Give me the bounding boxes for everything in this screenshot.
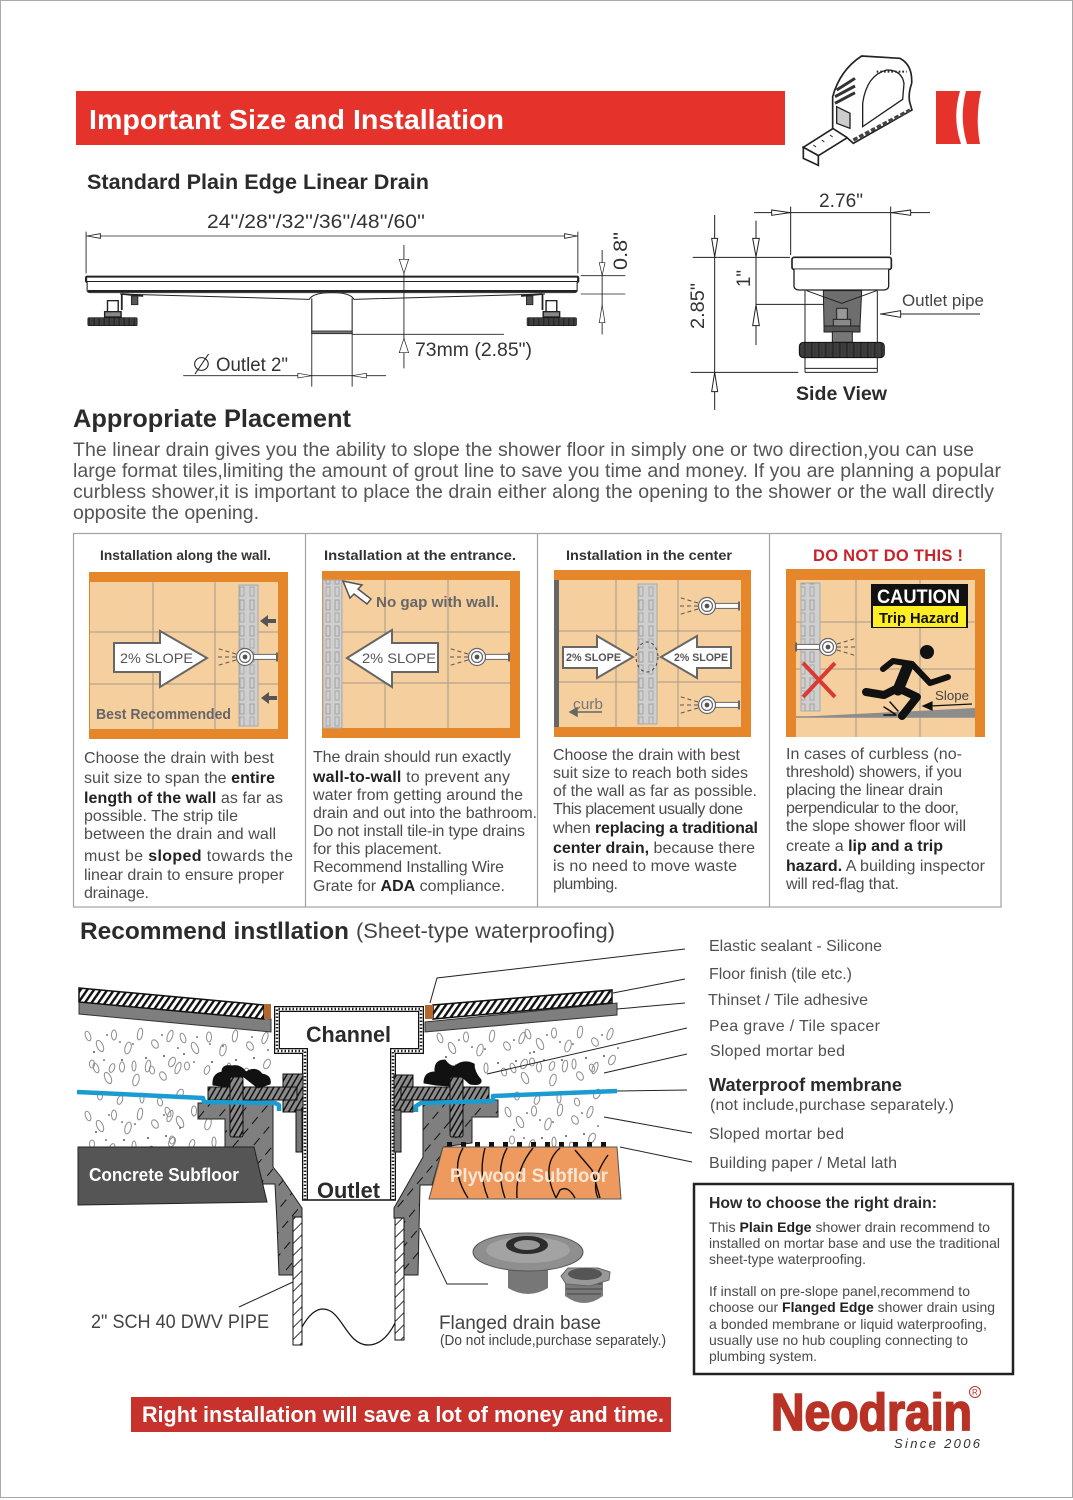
diagram: 2% SLOPE [120, 650, 193, 666]
diagram [89, 572, 288, 739]
callout: how to choose the right drain: sheet-type waterproofing. [709, 1252, 866, 1267]
diagram: Best Recommended [96, 707, 231, 723]
description: hazard. A building inspector [786, 858, 986, 875]
flange right [394, 1100, 498, 1275]
header banner [76, 91, 785, 145]
chart: installation cross-section [77, 988, 621, 1345]
description: drainage. [84, 885, 149, 902]
description: threshold) showers, if you [786, 764, 962, 781]
description: for this placement. [313, 841, 442, 858]
description: drain and out into the bathroom. [313, 805, 537, 822]
layer labels: (not include,purchase separately.) [710, 1097, 954, 1114]
logo: neodrain: Neodrain [771, 1384, 972, 1442]
description: In cases of curbless (no- [786, 746, 962, 763]
placement table frame [74, 533, 1001, 907]
callout: how to choose the right drain: If install on pre-slope panel,recommend to [709, 1284, 970, 1299]
diagram: Trip Hazard [879, 611, 959, 627]
panel: installation along the wall [84, 548, 293, 902]
outlet label: Outlet [317, 1178, 381, 1203]
callout: how to choose the right drain: How to choose the right drain: [709, 1195, 937, 1212]
callout: how to choose the right drain: This Plain Edge shower drain recommend to [709, 1220, 990, 1235]
description: water from getting around the [312, 787, 523, 804]
icon: tape measure [803, 56, 912, 165]
description: suit size to reach both sides [553, 765, 748, 782]
label: side view 1 inch: 1" [734, 270, 755, 287]
label: outlet pipe: Outlet pipe [902, 291, 984, 310]
panel title: DO NOT DO THIS ! [813, 547, 963, 565]
layer labels: Waterproof membrane [709, 1075, 902, 1095]
description [84, 750, 293, 902]
intro paragraph: The linear drain gives you the ability to slope the shower floor in simply one or two direction,you can use [73, 439, 974, 461]
heading: recommended installation [80, 918, 615, 945]
description: will red-flag that. [785, 876, 899, 893]
header banner: Important Size and Installation [89, 104, 504, 135]
layer labels: Pea grave / Tile spacer [709, 1018, 881, 1035]
clamp assembly, right [394, 1060, 489, 1152]
intro paragraph: opposite the opening. [73, 502, 259, 524]
concrete subfloor [78, 1147, 267, 1205]
heading: recommended installation: (Sheet-type waterproofing) [356, 919, 615, 943]
description: This placement usually done [553, 801, 743, 818]
label: side view: Side View [796, 384, 887, 405]
description: the slope shower floor will [786, 818, 966, 835]
layer labels: Thinset / Tile adhesive [708, 992, 868, 1009]
pipes [293, 1217, 404, 1345]
callout: how to choose the right drain: installed on mortar base and use the traditional [709, 1236, 1000, 1251]
diagram: CAUTION [877, 587, 960, 608]
description: Choose the drain with best [84, 750, 275, 767]
heading: recommended installation: Recommend instllation [80, 918, 349, 945]
description: Choose the drain with best [553, 747, 741, 764]
description [552, 747, 758, 893]
diagram: No gap with wall. [376, 595, 499, 611]
description: possible. The strip tile [84, 808, 238, 825]
channel [277, 1009, 421, 1200]
waterproof membrane [77, 1091, 617, 1112]
label: 0.8 inch: 0.8" [611, 232, 632, 270]
diagram: 2% SLOPE [362, 650, 436, 666]
diagram [554, 570, 751, 737]
description: Do not install tile-in type drains [313, 823, 525, 840]
label: side view width: 2.76" [819, 191, 863, 212]
chart: drain side view [691, 207, 980, 410]
description: The drain should run exactly [313, 749, 511, 766]
icon: flanged drain base product [473, 1233, 610, 1303]
diagram: Slope [935, 688, 969, 703]
description: plumbing. [553, 876, 618, 893]
drain dimension label: widths: 24''/28''/32''/36''/48''/60'' [207, 212, 425, 233]
diagram [786, 569, 985, 737]
intro paragraph: large format tiles,limiting the amount of grout line to save you time and money. If you are planning a popular [73, 460, 1002, 482]
panel: do not do this [785, 547, 986, 893]
panel title: Installation at the entrance. [324, 548, 516, 563]
floor tile and thinset, left [79, 988, 271, 1032]
concrete subfloor: Concrete Subfloor [89, 1165, 239, 1185]
diagram: 2% SLOPE [674, 652, 728, 664]
footer banner [131, 1397, 671, 1432]
description: create a lip and a trip [786, 838, 943, 855]
description: length of the wall as far as [84, 790, 283, 807]
layer labels: Building paper / Metal lath [709, 1155, 897, 1172]
label: dwv pipe: 2" SCH 40 DWV PIPE [91, 1312, 269, 1333]
intro paragraph: curbless shower,it is important to place the drain either along the opening to the shower or the wall directly [73, 481, 994, 503]
clamp assembly, left [208, 1066, 303, 1152]
layer labels: Sloped mortar bed [709, 1126, 844, 1143]
panel: installation in the center [552, 548, 758, 893]
description: wall-to-wall to prevent any [312, 769, 510, 786]
callout: how to choose the right drain: plumbing system. [709, 1349, 817, 1364]
description: is no need to move waste [553, 858, 737, 875]
icon: falling figure [866, 645, 948, 716]
layer labels: Floor finish (tile etc.) [709, 966, 852, 983]
description: placing the linear drain [786, 782, 943, 799]
header end accent [936, 91, 981, 144]
layer labels: Elastic sealant - Silicone [709, 938, 882, 955]
description: perpendicular to the door, [786, 800, 959, 817]
layer labels [708, 938, 954, 1172]
label: outlet size: Outlet 2" [216, 355, 288, 376]
intro paragraph [73, 439, 1002, 524]
leader lines [239, 949, 692, 1307]
description [785, 746, 986, 893]
channel label: Channel [306, 1022, 391, 1047]
logo: neodrain: Since 2006 [894, 1436, 981, 1451]
panel title: Installation in the center [566, 548, 733, 563]
callout: how to choose the right drain: a bonded membrane or liquid waterproofing, [709, 1317, 987, 1332]
description: suit size to span the entire [84, 770, 275, 787]
label: flanged drain base [439, 1313, 666, 1349]
callout: how to choose the right drain [694, 1184, 1013, 1374]
layer labels: Sloped mortar bed [710, 1043, 845, 1060]
label: drain height: 73mm (2.85") [415, 340, 532, 361]
description: of the wall as far as possible. [553, 783, 757, 800]
label: flanged drain base: (Do not include,purchase separately.) [440, 1333, 666, 1349]
description: must be sloped towards the [84, 848, 293, 865]
description: between the drain and wall [84, 826, 276, 843]
diagram: curb [573, 696, 603, 713]
label: side view height: 2.85" [688, 283, 709, 329]
description: linear drain to ensure proper [84, 867, 285, 884]
plywood subfloor: Plywood Subfloor [450, 1166, 609, 1187]
description [312, 749, 537, 895]
label: flanged drain base: Flanged drain base [439, 1313, 601, 1334]
description: Grate for ADA compliance. [313, 878, 505, 895]
mortar bed aggregate [84, 1026, 619, 1155]
description: center drain, because there [553, 840, 755, 857]
heading: appropriate placement: Appropriate Placement [73, 405, 352, 433]
heading: standard plain edge linear drain: Standard Plain Edge Linear Drain [87, 171, 429, 194]
logo: neodrain: R [972, 1388, 978, 1397]
flange left [198, 1103, 302, 1275]
floor tile and thinset, right [425, 990, 617, 1032]
footer banner: Right installation will save a lot of money and time. [142, 1402, 664, 1427]
diagram: 2% SLOPE [566, 652, 621, 664]
plywood subfloor [429, 1142, 621, 1199]
callout: how to choose the right drain: choose our Flanged Edge shower drain using [709, 1300, 995, 1315]
description: Recommend Installing Wire [313, 859, 504, 876]
chart: linear drain front view [86, 232, 625, 387]
panel: installation at the entrance [312, 548, 537, 895]
description: when replacing a traditional [552, 820, 758, 837]
panel title: Installation along the wall. [100, 548, 271, 563]
callout: how to choose the right drain: usually use no hub coupling connecting to [709, 1333, 968, 1348]
diagram [322, 571, 520, 738]
